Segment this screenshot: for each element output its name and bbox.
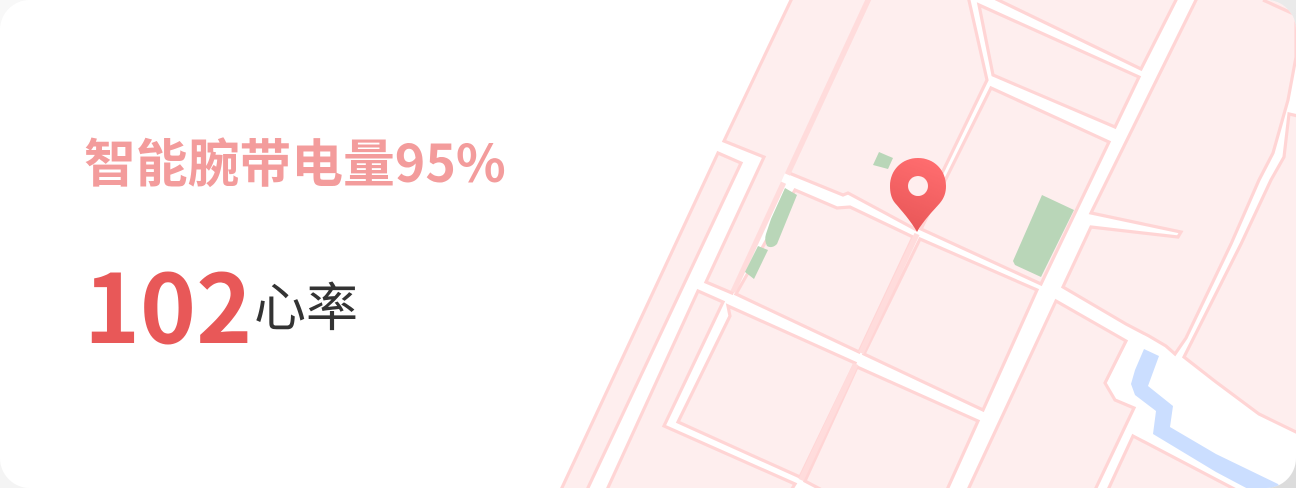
heading: battery: 智能腕带电量95% [84, 122, 506, 197]
river [1131, 349, 1282, 488]
east-west road start [783, 178, 802, 186]
heart rate label: 心率 [254, 266, 358, 341]
location pin [890, 158, 946, 232]
city blocks [560, 0, 1296, 488]
metric: heart rate [84, 234, 358, 371]
corner road line [1263, 0, 1296, 15]
heart rate value: 102 [84, 234, 252, 371]
minor pink roads [733, 0, 917, 480]
parks [745, 152, 1074, 279]
